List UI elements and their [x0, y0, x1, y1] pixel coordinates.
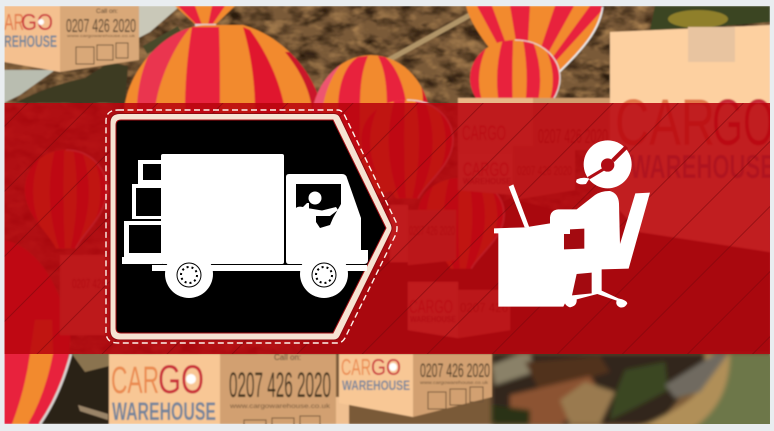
- ghost cardboard boxes behind band: 0207 426 2020: [517, 163, 572, 178]
- truck container: [161, 154, 284, 264]
- cardboard box: top left: Call on:: [96, 8, 118, 15]
- ghost cardboard boxes behind band: WAREHOUSE: [463, 177, 512, 186]
- ghost cardboard boxes behind band: [60, 98, 610, 338]
- desk drawer cutout: [564, 229, 584, 249]
- cardboard box: top left: [4, 6, 139, 72]
- cardboard box: top left: REHOUSE: [4, 32, 57, 51]
- ghost cardboard boxes behind band: 0207 426: [72, 276, 106, 291]
- cardboard box: large right: CAR: [615, 85, 715, 159]
- balloon: top right: [465, 6, 605, 73]
- cardboard box: bottom centre: www.cargowarehouse.co.uk: [229, 404, 331, 410]
- cardboard box: bottom centre: GO: [158, 358, 204, 402]
- truck cab: [286, 174, 368, 264]
- balloon: bottom left: [4, 240, 71, 424]
- cardboard box: bottom right: WAREHOUSE: [342, 377, 410, 393]
- truck chassis: [152, 265, 367, 271]
- cardboard box: bottom right: 0207 426 2020: [420, 361, 490, 382]
- cardboard box: bottom centre: 0207 426 2020: [229, 366, 331, 405]
- balloon: large centre-left: [124, 24, 318, 113]
- truck wheels: [165, 250, 348, 298]
- agent head with headset: [576, 140, 632, 188]
- cardboard box: bottom centre: WAREHOUSE: [112, 398, 216, 426]
- cardboard box: bottom right: [339, 354, 492, 417]
- hot air balloons: [4, 0, 606, 424]
- truck cargo boxes: [122, 160, 162, 264]
- cardboard box: top left: www.cargowarehouse.co.uk: [67, 33, 135, 38]
- balloon: ghost left: [24, 149, 108, 249]
- cardboard box: top left: GO: [21, 9, 53, 35]
- balloon: second: [313, 54, 429, 194]
- balloon: front right: [468, 38, 562, 99]
- icon: delivery truck: [122, 154, 368, 298]
- ghost cardboard boxes behind band: CARGO: [409, 297, 453, 317]
- agent body and chair: [494, 191, 650, 307]
- red translucent band: [4, 103, 770, 354]
- balloon: ghost centre: [362, 98, 454, 198]
- ghost cardboard boxes behind band: 0207 426 2020: [409, 223, 455, 238]
- gap under seat: [572, 273, 592, 295]
- ghost cardboard boxes behind band: CARGO: [462, 122, 506, 145]
- balloon: ghost lower centre: [418, 178, 506, 269]
- town scene bottom right: [492, 354, 774, 430]
- cardboard box: bottom right: GO: [371, 354, 401, 380]
- ghost cardboard boxes behind band: WAREHOUSE: [410, 315, 457, 324]
- icon: call centre agent at desk: [494, 140, 650, 307]
- cardboard box: bottom right: www.cargowarehouse.co.uk: [420, 380, 489, 385]
- cardboard box: top left: 0207 426 2020: [66, 16, 136, 36]
- ghost cardboard boxes behind band: 0207 426 2020: [538, 126, 608, 148]
- cardboard box: bottom right: CAR: [341, 354, 371, 380]
- cardboard box: large right: [610, 25, 774, 252]
- laptop screen: [509, 184, 529, 227]
- badge: truck arrow panel: [106, 110, 397, 343]
- cardboard box: bottom centre: Call on:: [274, 353, 301, 362]
- cardboard box: top left: AR: [4, 9, 24, 35]
- cab window with driver: [296, 184, 341, 228]
- ghost cardboard boxes behind band: CARGO: [463, 160, 509, 181]
- balloon: top tail: [175, 6, 235, 26]
- cardboard box: bottom centre: CAR: [111, 360, 159, 402]
- cardboard box: bottom centre: [109, 353, 349, 430]
- ghost cardboard boxes behind band: 0207 426: [460, 300, 508, 315]
